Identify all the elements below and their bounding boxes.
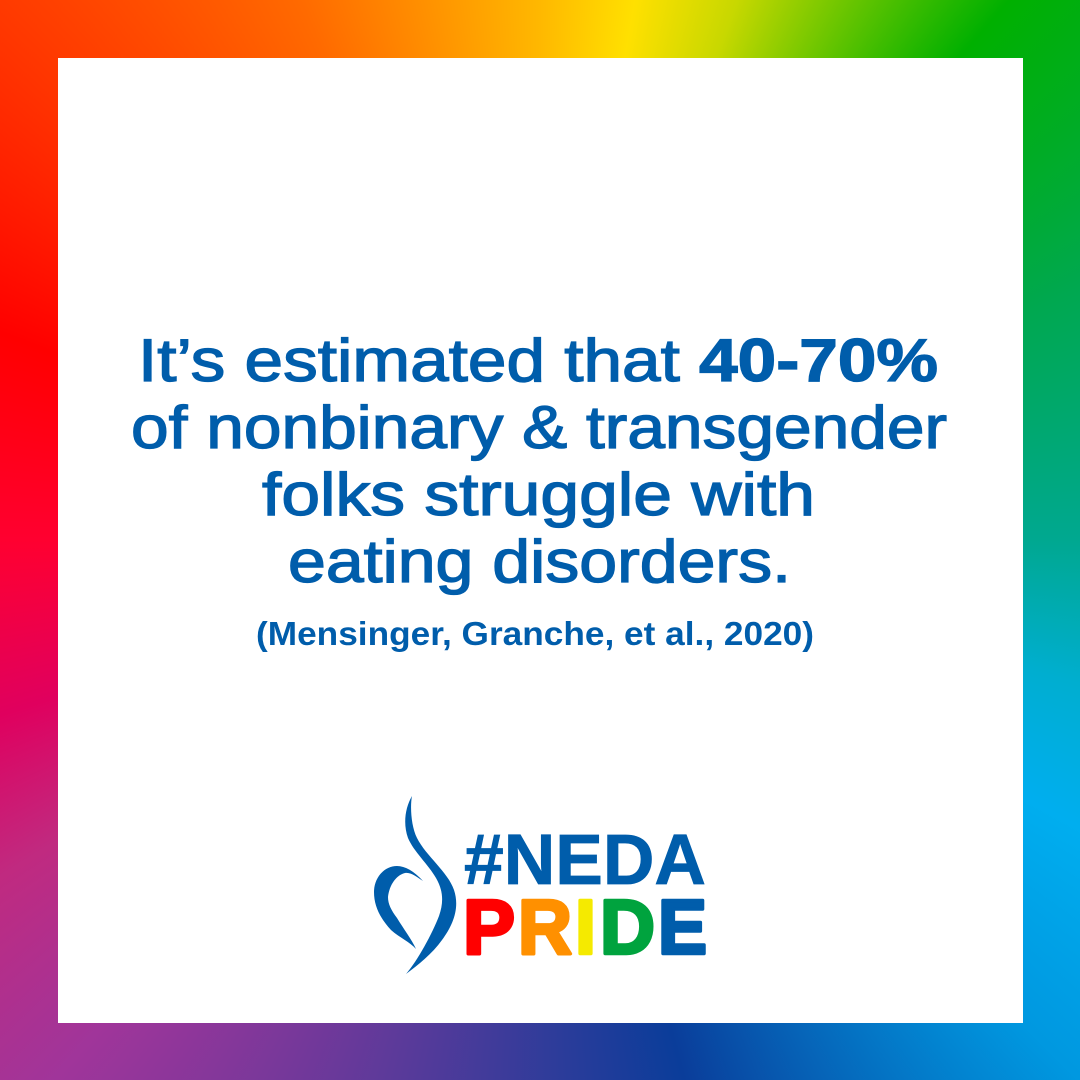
#NEDA wordmark: #NEDA — [464, 821, 706, 900]
headline statement: It’s estimated that 40-70% — [138, 327, 938, 394]
headline statement — [131, 327, 947, 595]
NEDA PRIDE logo — [374, 796, 707, 974]
PRIDE wordmark: R — [518, 884, 572, 970]
PRIDE wordmark: I — [575, 884, 596, 970]
PRIDE wordmark — [463, 884, 707, 970]
white panel — [58, 58, 1023, 1023]
PRIDE wordmark: E — [658, 884, 707, 970]
headline statement: folks struggle with — [262, 461, 815, 528]
citation: (Mensinger, Granche, et al., 2020) — [256, 615, 814, 652]
icon: NEDA swoosh figure — [374, 796, 456, 974]
PRIDE wordmark: P — [463, 884, 515, 970]
headline statement: of nonbinary & transgender — [131, 394, 947, 461]
PRIDE wordmark: D — [600, 884, 655, 970]
headline statement: eating disorders. — [288, 528, 791, 595]
